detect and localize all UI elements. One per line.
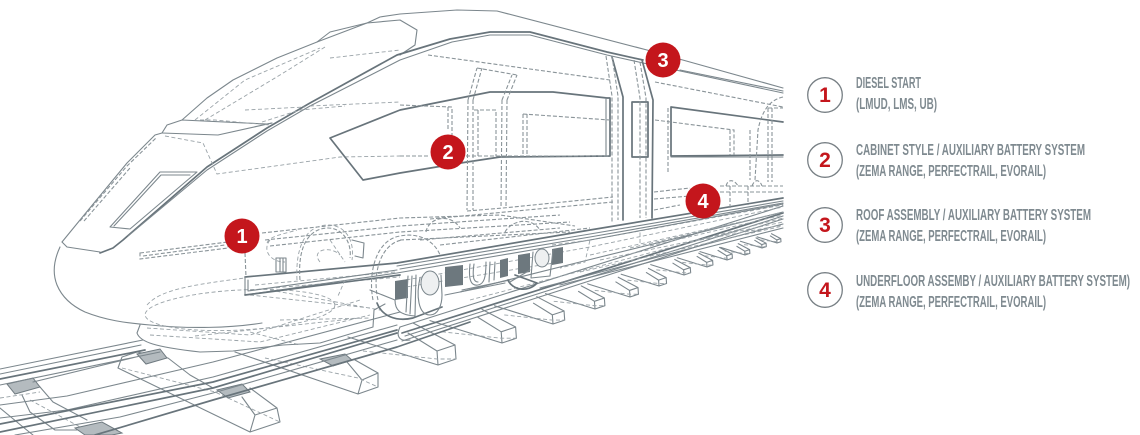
- wheels and tanks: [267, 181, 762, 300]
- body shoulder line: [100, 32, 643, 253]
- legend item 1: diesel start: [808, 75, 937, 113]
- railway track: [0, 206, 783, 435]
- legend item 4: underfloor assembly: 4: [819, 279, 831, 302]
- bogies: [370, 247, 563, 319]
- legend: [808, 75, 1130, 311]
- side skirt: [245, 198, 783, 295]
- roof outline: [182, 10, 783, 120]
- passenger window band: [330, 92, 610, 180]
- marker 4: 4: [697, 191, 709, 213]
- sleepers near the viewer: [0, 349, 378, 435]
- marker 3: 3: [657, 50, 669, 72]
- legend item 2: cabinet style: 2: [819, 149, 831, 172]
- roof hatch: [317, 20, 417, 55]
- legend item 1: diesel start: DIESEL START: [856, 75, 921, 92]
- sleepers receding to the right: [348, 234, 781, 365]
- legend item 3: roof assembly: 3: [819, 214, 831, 237]
- legend item 2: cabinet style: [808, 142, 1085, 180]
- marker 2: 2: [442, 142, 454, 164]
- front side window: [110, 172, 197, 229]
- nose and windshield: [62, 120, 272, 242]
- marker 1: 1: [236, 226, 248, 248]
- door and door window: [612, 57, 653, 220]
- legend item 1: diesel start: 1: [819, 84, 831, 107]
- train wireframe: [54, 10, 783, 352]
- marker 2: [430, 134, 466, 170]
- legend item 1: diesel start: (LMUD, LMS, UB): [856, 96, 937, 113]
- marker 3: [646, 42, 680, 78]
- lower bodyside: [137, 304, 385, 352]
- hidden structure: [140, 55, 783, 345]
- rails: [0, 206, 783, 435]
- legend item 3: roof assembly: [808, 207, 1091, 245]
- marker 4: [686, 184, 720, 218]
- rear window: [671, 107, 783, 156]
- rail fastening plates: [7, 349, 352, 435]
- legend item 4: underfloor assembly: [808, 273, 1130, 311]
- marker 1: [224, 218, 260, 254]
